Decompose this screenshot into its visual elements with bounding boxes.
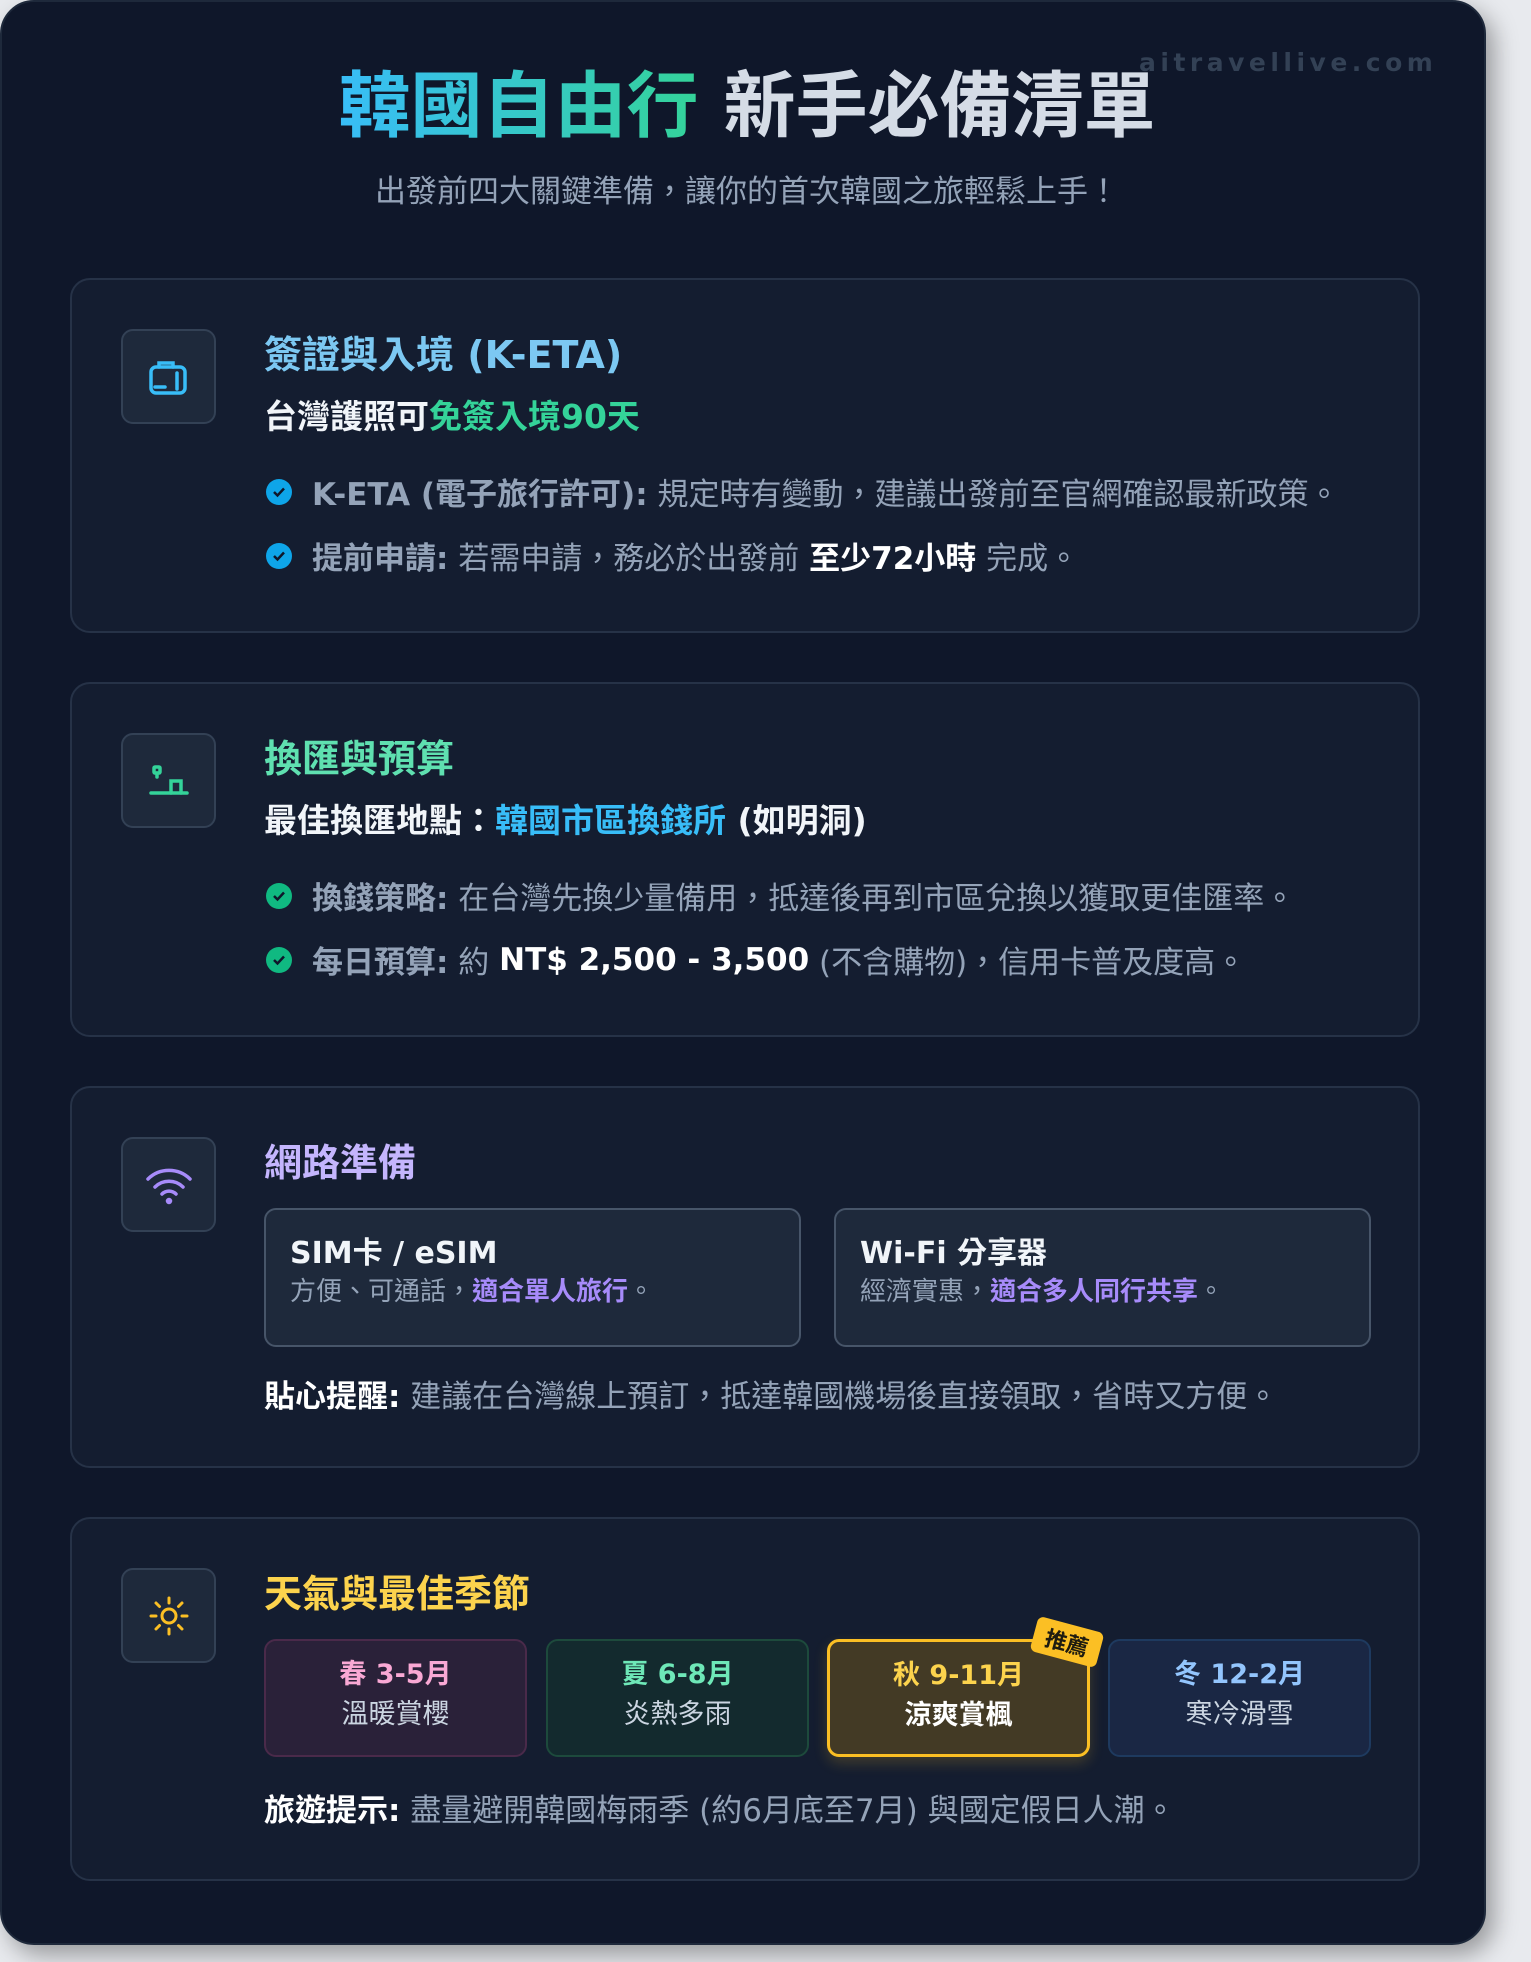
- subheading: 最佳換匯地點：韓國市區換錢所 (如明洞): [264, 801, 867, 840]
- panel: weather: [70, 1517, 1420, 1881]
- season: autumn: [827, 1639, 1090, 1757]
- panel: internet: [70, 1086, 1420, 1468]
- icon: wifi: [121, 1137, 216, 1232]
- icon: passport: [121, 329, 216, 424]
- bullet 1: K-ETA (電子旅行許可):: [312, 477, 648, 513]
- season: summer: 炎熱多雨: [624, 1699, 732, 1730]
- season: winter: 寒冷滑雪: [1186, 1699, 1294, 1730]
- bullet 1: 在台灣先換少量備用，抵達後再到市區兌換以獲取更佳匯率。: [458, 881, 1295, 917]
- bullet 2: 提前申請:: [312, 541, 448, 577]
- season: autumn: 秋 9-11月: [893, 1660, 1024, 1691]
- option: SIM: 方便、可通話，適合單人旅行。: [290, 1277, 654, 1307]
- subheading: 台灣護照可免簽入境90天: [264, 397, 640, 436]
- bullet 2: NT$ 2,500 - 3,500: [499, 942, 809, 978]
- bullet 1: [266, 477, 1340, 513]
- tip: 盡量避開韓國梅雨季 (約6月底至7月) 與國定假日人潮。: [410, 1793, 1176, 1829]
- subtitle: 出發前四大關鍵準備，讓你的首次韓國之旅輕鬆上手！: [375, 174, 1119, 210]
- season: winter: [1108, 1639, 1371, 1757]
- heading: 換匯與預算: [264, 737, 454, 781]
- season: autumn: 涼爽賞楓: [904, 1700, 1012, 1731]
- icon: sun: [121, 1568, 216, 1663]
- season: spring: [264, 1639, 527, 1757]
- option: SIM: [264, 1208, 801, 1347]
- tip: 旅遊提示:: [264, 1793, 400, 1829]
- option: SIM: SIM卡 / eSIM: [290, 1236, 497, 1271]
- season: summer: [546, 1639, 809, 1757]
- bullet 1: 換錢策略:: [312, 881, 448, 917]
- title: 韓國自由行 新手必備清單: [338, 64, 1156, 148]
- tip: 貼心提醒:: [264, 1379, 400, 1415]
- bullet 2: 每日預算:: [312, 945, 448, 981]
- bullet 2: 約 (不含購物)，信用卡普及度高。: [458, 945, 1246, 981]
- option: wifi: 經濟實惠，適合多人同行共享。: [860, 1277, 1224, 1307]
- option: wifi: [834, 1208, 1371, 1347]
- panel: money: [70, 682, 1420, 1037]
- panel: visa: [70, 278, 1420, 633]
- heading: 簽證與入境 (K-ETA): [264, 333, 622, 377]
- badge: recommended: 推薦: [1042, 1627, 1091, 1662]
- bullet 2: 至少72小時: [809, 541, 976, 577]
- season: spring: 春 3-5月: [339, 1659, 452, 1690]
- season: winter: 冬 12-2月: [1174, 1659, 1305, 1690]
- season: summer: 夏 6-8月: [621, 1659, 734, 1690]
- tip: 建議在台灣線上預訂，抵達韓國機場後直接領取，省時又方便。: [410, 1379, 1278, 1415]
- bullet 2: 若需申請，務必於出發前 完成。: [458, 541, 1079, 577]
- badge: recommended: [1029, 1616, 1104, 1668]
- bullet 1: 規定時有變動，建議出發前至官網確認最新政策。: [657, 477, 1340, 513]
- watermark: aitravellive.com: [1139, 48, 1437, 77]
- heading: 天氣與最佳季節: [264, 1572, 530, 1616]
- season: spring: 溫暖賞櫻: [342, 1699, 450, 1730]
- option: wifi: Wi-Fi 分享器: [860, 1236, 1047, 1271]
- heading: 網路準備: [264, 1141, 416, 1185]
- icon: money: [121, 733, 216, 828]
